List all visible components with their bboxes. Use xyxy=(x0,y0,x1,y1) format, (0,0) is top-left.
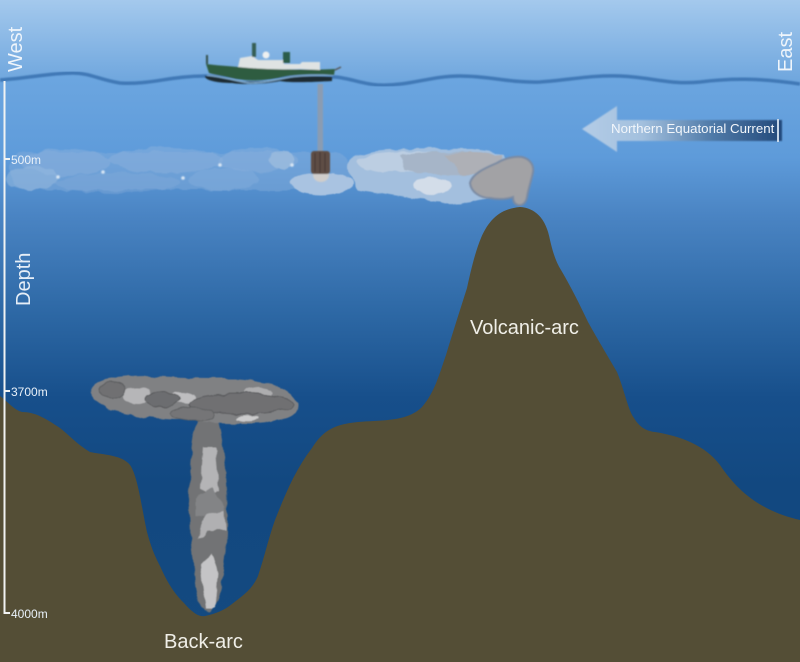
plume: back-arc stem xyxy=(190,414,228,612)
terrain xyxy=(0,207,800,662)
ship hull xyxy=(206,64,335,80)
ship superstructure xyxy=(238,56,320,70)
depth tick labels: 500m xyxy=(11,153,41,167)
plume: source over summit xyxy=(470,157,533,205)
depth axis: 4000m xyxy=(11,607,48,621)
ship cable xyxy=(318,84,323,154)
depth axis xyxy=(4,81,48,621)
arrow: northern equatorial current xyxy=(582,106,782,152)
plume: shallow pale haze xyxy=(6,147,350,193)
label: volcanic-arc: Volcanic-arc xyxy=(470,317,579,339)
compass label: west: West xyxy=(5,26,27,72)
background: sky xyxy=(0,0,800,95)
compass label: east: East xyxy=(775,32,797,72)
arrow end cap xyxy=(777,119,779,142)
axis label: depth: Depth xyxy=(13,253,35,306)
label: back-arc: Back-arc xyxy=(164,631,243,653)
ship xyxy=(205,43,341,154)
water surface line xyxy=(0,73,800,85)
depth axis: 3700m xyxy=(11,385,48,399)
plume: volcanic-arc plume drifting west xyxy=(290,148,510,203)
instrument package xyxy=(311,151,330,182)
plume: back-arc umbrella xyxy=(92,375,298,423)
arrow label: Northern Equatorial Current xyxy=(611,121,775,136)
ship lower hull xyxy=(205,76,332,84)
plume: haze bright spots xyxy=(56,163,294,180)
ship wave highlight xyxy=(207,75,333,83)
